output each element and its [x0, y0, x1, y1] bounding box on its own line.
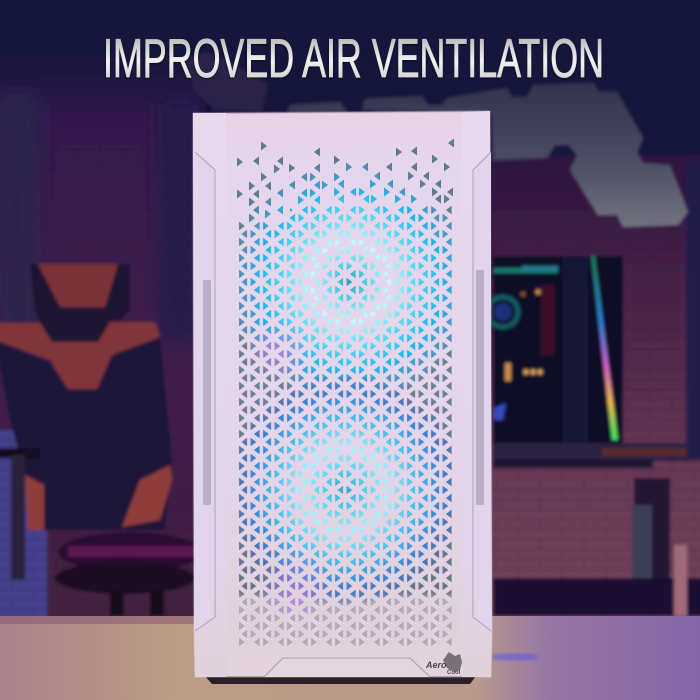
- mesh backing with fan glow: [228, 135, 466, 651]
- left side strip: [193, 113, 226, 677]
- case feet shadow: [205, 676, 476, 684]
- left brick wall: [0, 50, 200, 620]
- perforated front panel: [193, 111, 492, 677]
- gaming chair: [0, 264, 202, 616]
- bottom trapezoid trim: [264, 658, 430, 677]
- brand logo: Cool: [447, 670, 461, 676]
- PC case: [193, 111, 492, 684]
- hexagon wall lights: [185, 52, 688, 227]
- right side strip: [462, 111, 492, 677]
- brand logo: [425, 652, 462, 676]
- table top: [0, 616, 700, 700]
- brand logo: Aero: [425, 660, 447, 670]
- upper fan glow: [228, 160, 466, 405]
- desktop PC on desk: [488, 256, 623, 446]
- right brick wall: [490, 155, 700, 620]
- lower fan glow: [228, 374, 466, 606]
- desk: [493, 443, 700, 616]
